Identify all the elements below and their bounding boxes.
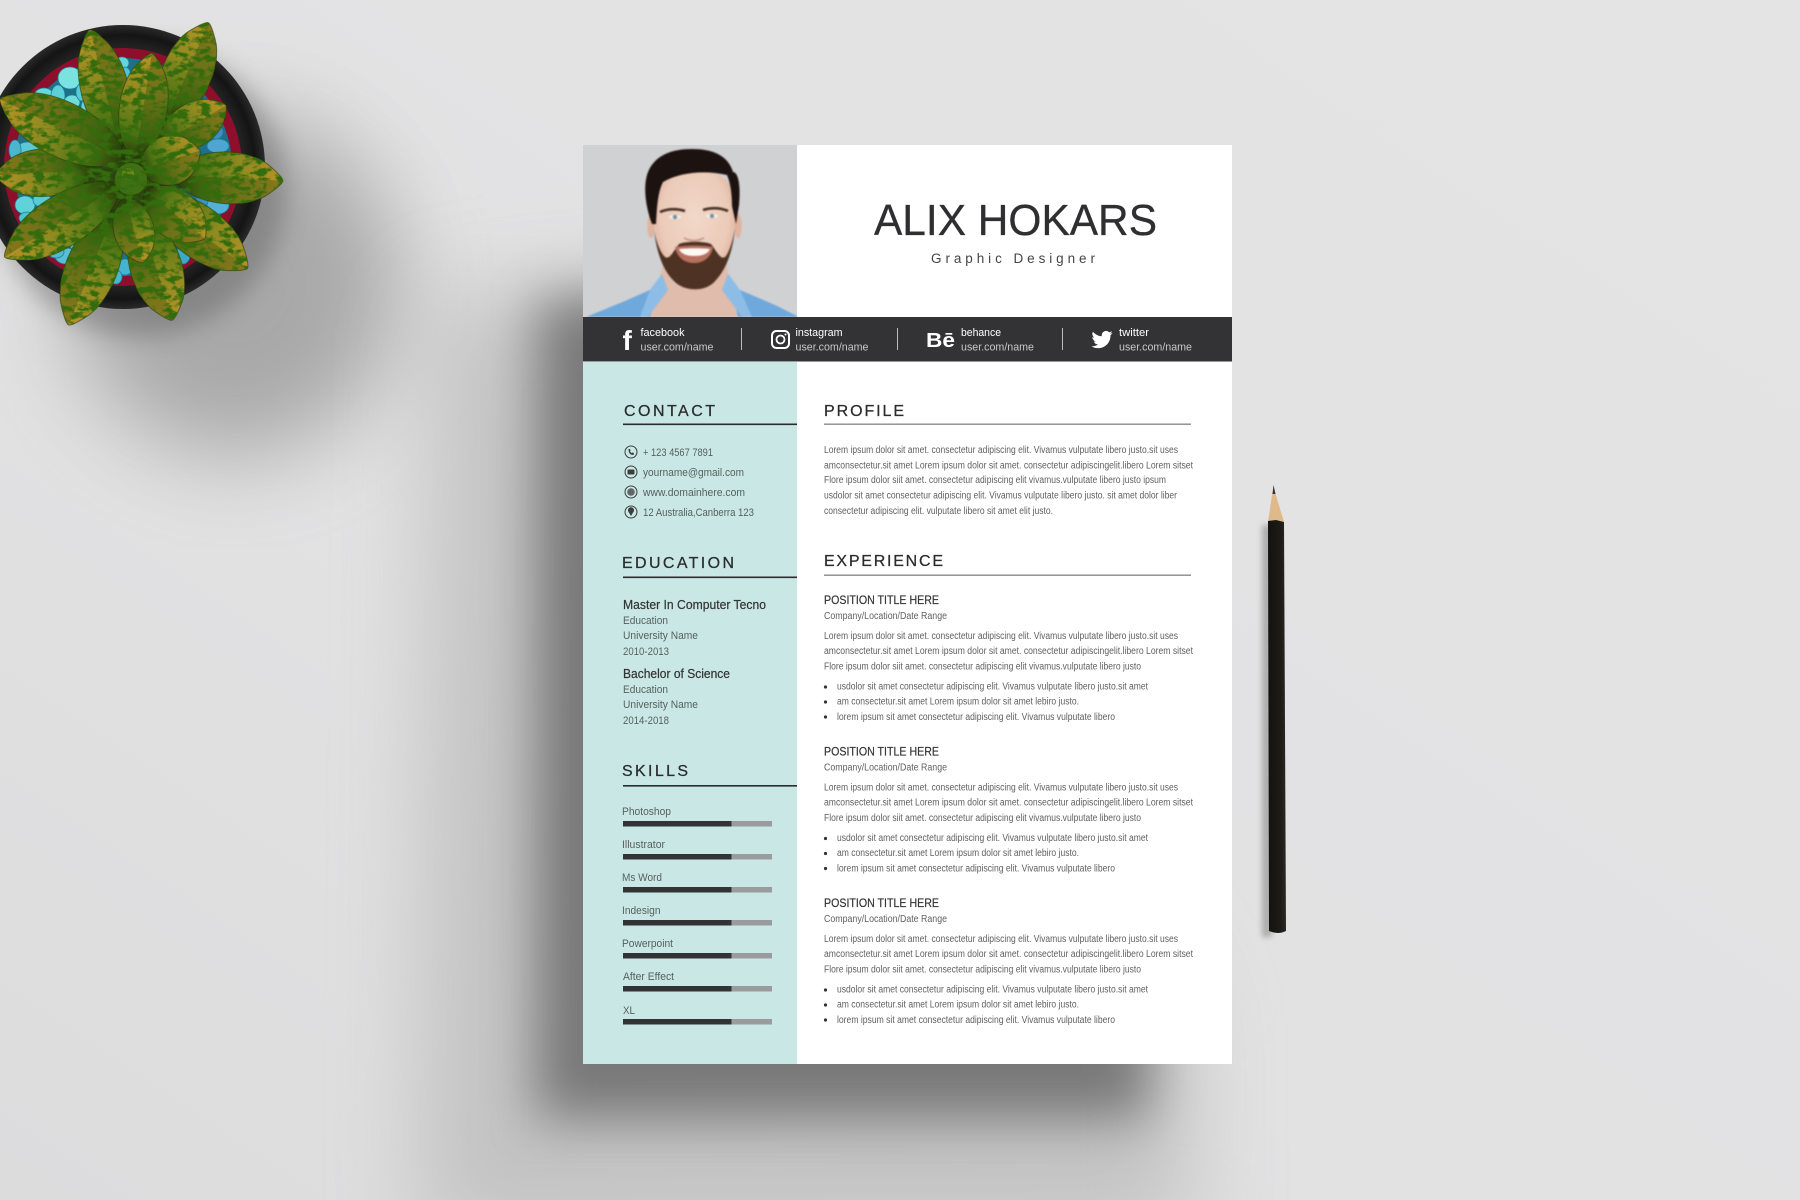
education section: 2010-2013 [623,646,669,658]
address: 12 Australia,Canberra 123 [643,507,754,519]
hair [645,149,740,224]
behance: user.com/name [961,342,1034,354]
ears [647,214,655,238]
skill bar: XL: XL [623,1005,635,1017]
contact section [623,403,797,519]
skill bar: Illustrator [622,839,772,860]
twitter: user.com/name [1119,342,1192,354]
job entry 3: usdolor sit amet consectetur adipiscing elit. Vivamus vulputate libero justo.sit amet [837,984,1148,996]
instagram: instagram [796,327,842,339]
profile section: usdolor sit amet consectetur adipiscing elit. Vivamus vulputate libero justo. sit amet dolor liber [824,491,1178,502]
behance: Bē [926,330,955,352]
profile section: amconsectetur.sit amet Lorem ipsum dolor sit amet. consectetur adipiscingelit.libero Lorem sitset [824,460,1193,472]
education section: Bachelor of Science [623,667,730,681]
website: www.domainhere.com [642,487,745,499]
job entry 3: Lorem ipsum dolor sit amet. consectetur adipiscing elit. Vivamus vulputate libero justo.sit uses [824,934,1178,945]
job entry 2: Flore ipsum dolor siit amet. consectetur adipiscing elit vivamus.vulputate libero justo [824,813,1141,824]
pencil shadow [1262,525,1272,937]
email: yourname@gmail.com [643,467,744,479]
job entry 2: lorem ipsum sit amet consectetur adipiscing elit. Vivamus vulputate libero [837,864,1115,874]
skill bar: Photoshop [622,806,772,826]
shirt placket right [722,274,752,317]
contact section: CONTACT [624,403,715,420]
job entry 3: Company/Location/Date Range [824,914,947,925]
paper [583,145,1232,1064]
pot [0,25,265,309]
job title: Graphic Designer [931,251,1096,266]
job entry 2: Lorem ipsum dolor sit amet. consectetur adipiscing elit. Vivamus vulputate libero justo.sit uses [824,782,1178,794]
facebook: f [622,325,632,356]
skills section [622,763,797,1024]
education section: Master In Computer Tecno [623,598,766,612]
instagram: user.com/name [796,342,868,354]
skill bar: Indesign [622,905,772,926]
education section: University Name [623,630,698,642]
phone [625,446,713,459]
profile section: consectetur adipiscing elit. vulputate libero sit amet elit justo. [824,506,1053,517]
education section: 2014-2018 [623,715,669,727]
pencil wood tip [1268,492,1284,522]
twitter: twitter [1119,327,1149,339]
skill bar: XL [623,1005,772,1024]
phone: + 123 4567 7891 [643,447,713,459]
experience section: EXPERIENCE [824,553,943,570]
teeth [679,248,710,256]
pencil [1262,485,1286,937]
experience section [824,553,1193,1026]
lips [675,246,713,263]
job entry 2: POSITION TITLE HERE [824,744,939,758]
education section: EDUCATION [622,555,734,572]
panel: photo [583,145,797,317]
pencil lead [1272,485,1276,494]
education section [622,555,797,727]
red inner ring [9,53,237,281]
job entry 1: usdolor sit amet consectetur adipiscing elit. Vivamus vulputate libero justo.sit amet [837,682,1148,692]
neck [650,262,738,317]
job entry 2: amconsectetur.sit amet Lorem ipsum dolor sit amet. consectetur adipiscingelit.libero Lorem sitset [824,798,1193,808]
resume page [583,145,1232,1064]
eyes and brows [660,208,728,240]
skill bar: Powerpoint [622,938,772,958]
skill bar: Powerpoint: Powerpoint [622,938,673,950]
skill bar: After Effect: After Effect [623,971,674,983]
job entry 1: POSITION TITLE HERE [824,593,939,607]
job entry 1: lorem ipsum sit amet consectetur adipiscing elit. Vivamus vulputate libero [837,712,1115,723]
job entry 1 [824,593,1193,723]
panel: sidebar [583,362,797,1064]
skill bar: After Effect [623,971,772,992]
succulent leaves [0,13,284,335]
job entry 1: am consectetur.sit amet Lorem ipsum dolor sit amet lebiro justo. [837,697,1079,708]
profile section: Lorem ipsum dolor sit amet. consectetur adipiscing elit. Vivamus vulputate libero justo.sit uses [824,445,1178,456]
job entry 1: Company/Location/Date Range [824,611,947,622]
profile section: PROFILE [824,403,904,420]
job entry 1: amconsectetur.sit amet Lorem ipsum dolor sit amet. consectetur adipiscingelit.libero Lorem sitset [824,646,1193,657]
shirt [586,274,797,317]
shirt placket left [640,274,668,317]
skill bar: Illustrator: Illustrator [622,839,665,851]
job entry 3: Flore ipsum dolor siit amet. consectetur adipiscing elit vivamus.vulputate libero justo [824,964,1141,975]
behance: behance [961,327,1001,339]
skills section: SKILLS [622,763,688,780]
pencil body [1268,520,1286,933]
paper shadow [420,270,1190,1200]
profile section [824,403,1193,517]
profile section: Flore ipsum dolor siit amet. consectetur adipiscing elit vivamus.vulputate libero justo ipsum [824,475,1166,486]
job entry 3 [824,896,1193,1026]
education section: Education [623,684,668,696]
job entry 3: lorem ipsum sit amet consectetur adipiscing elit. Vivamus vulputate libero [837,1015,1115,1026]
instagram [772,327,868,354]
social bar [583,317,1232,362]
skill bar: Indesign: Indesign [622,905,660,917]
skill bar: Ms Word [622,872,772,892]
job entry 3: am consectetur.sit amet Lorem ipsum dolor sit amet lebiro justo. [837,1000,1079,1011]
facebook [622,325,714,356]
job entry 3: POSITION TITLE HERE [824,896,939,910]
job entry 2: Company/Location/Date Range [824,762,947,774]
job entry 2: usdolor sit amet consectetur adipiscing elit. Vivamus vulputate libero justo.sit amet [837,833,1148,844]
beard under lip [672,258,717,288]
job entry 2: am consectetur.sit amet Lorem ipsum dolor sit amet lebiro justo. [837,848,1079,859]
twitter [1092,327,1192,354]
face [654,170,735,290]
education section: Education [623,615,668,627]
teal stones [9,57,229,284]
job entry 1: Lorem ipsum dolor sit amet. consectetur adipiscing elit. Vivamus vulputate libero justo.sit uses [824,631,1178,642]
plant in pot [0,13,284,335]
facebook: facebook [640,327,685,339]
beard [654,228,735,289]
job entry 1: Flore ipsum dolor siit amet. consectetur adipiscing elit vivamus.vulputate libero justo [824,661,1141,672]
job entry 3: amconsectetur.sit amet Lorem ipsum dolor sit amet. consectetur adipiscingelit.libero Lorem sitset [824,949,1193,960]
plant shadow [0,44,400,455]
skill bar: Ms Word: Ms Word [622,872,662,884]
education section: University Name [623,699,698,711]
skill bar: Photoshop: Photoshop [622,806,671,818]
name heading: ALIX HOKARS [874,196,1157,245]
behance [926,327,1034,354]
facebook: user.com/name [640,342,714,354]
job entry 2 [824,744,1193,874]
